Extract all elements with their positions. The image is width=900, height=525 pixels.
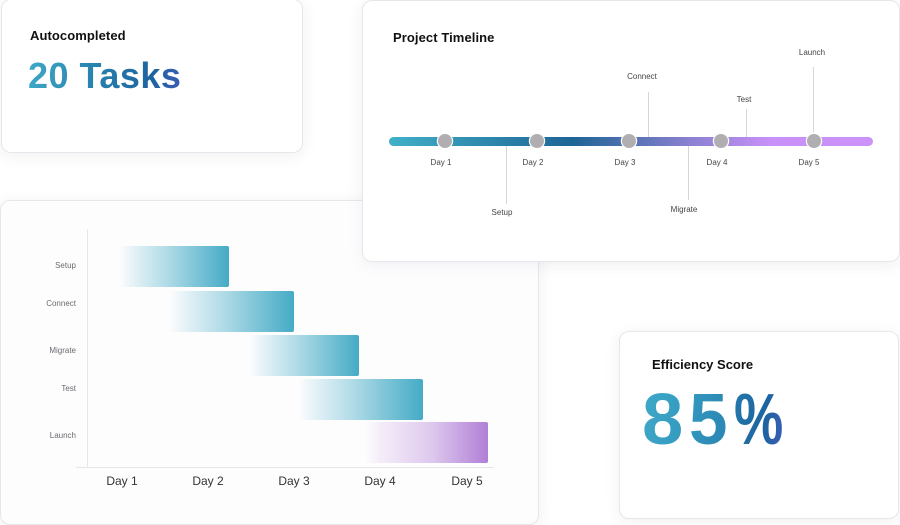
milestone 4 (714, 134, 728, 148)
connector: setup (506, 144, 507, 204)
milestone 5 (806, 134, 820, 148)
timeline label: connect: Connect (627, 72, 657, 81)
heading: efficiency score: Efficiency Score (652, 357, 753, 372)
task label: launch: Launch (50, 431, 76, 440)
chart axes (76, 229, 494, 468)
timeline day: 5: Day 5 (799, 158, 819, 167)
axis label: day 5: Day 5 (451, 474, 483, 488)
task label: setup: Setup (55, 261, 76, 270)
timeline label: test: Test (737, 95, 751, 104)
connector: migrate (688, 144, 689, 200)
task label: test: Test (61, 384, 76, 393)
timeline chart (389, 48, 873, 217)
milestone 3 (622, 134, 636, 148)
metric: 85%: 8 (642, 380, 683, 460)
task label: connect: Connect (46, 299, 76, 308)
metric: 20 tasks: 20 Tasks (28, 55, 181, 96)
panel: project timeline (362, 0, 900, 262)
bar: setup (119, 246, 229, 287)
connector: test (746, 109, 747, 137)
timeline day: 2: Day 2 (523, 158, 543, 167)
bar: launch (365, 422, 488, 463)
timeline day: 4: Day 4 (707, 158, 727, 167)
bar: connect (169, 291, 294, 332)
timeline day: 3: Day 3 (615, 158, 635, 167)
heading: project timeline: Project Timeline (393, 30, 494, 45)
metric: 85%: 5 (689, 380, 727, 460)
bar: migrate (249, 335, 359, 376)
milestone 2 (530, 134, 544, 148)
panel: autocompleted (1, 0, 303, 153)
timeline bar (389, 136, 873, 146)
metric: 85%: % (734, 380, 783, 460)
milestone 1 (438, 134, 452, 148)
heading: autocompleted: Autocompleted (30, 28, 126, 43)
connector: launch (813, 67, 814, 137)
panel: efficiency score (619, 331, 899, 519)
axis label: day 1: Day 1 (106, 474, 138, 488)
timeline label: setup: Setup (492, 208, 512, 217)
bar: test (298, 379, 423, 420)
connector: connect (648, 92, 649, 137)
axis label: day 2: Day 2 (192, 474, 224, 488)
axis label: day 4: Day 4 (364, 474, 396, 488)
metric: 85% (642, 380, 783, 460)
timeline label: launch: Launch (799, 48, 825, 57)
timeline label: migrate: Migrate (671, 205, 697, 214)
panel: gantt chart (0, 200, 539, 525)
task label: migrate: Migrate (49, 346, 76, 355)
axis label: day 3: Day 3 (278, 474, 310, 488)
timeline day: 1: Day 1 (431, 158, 451, 167)
